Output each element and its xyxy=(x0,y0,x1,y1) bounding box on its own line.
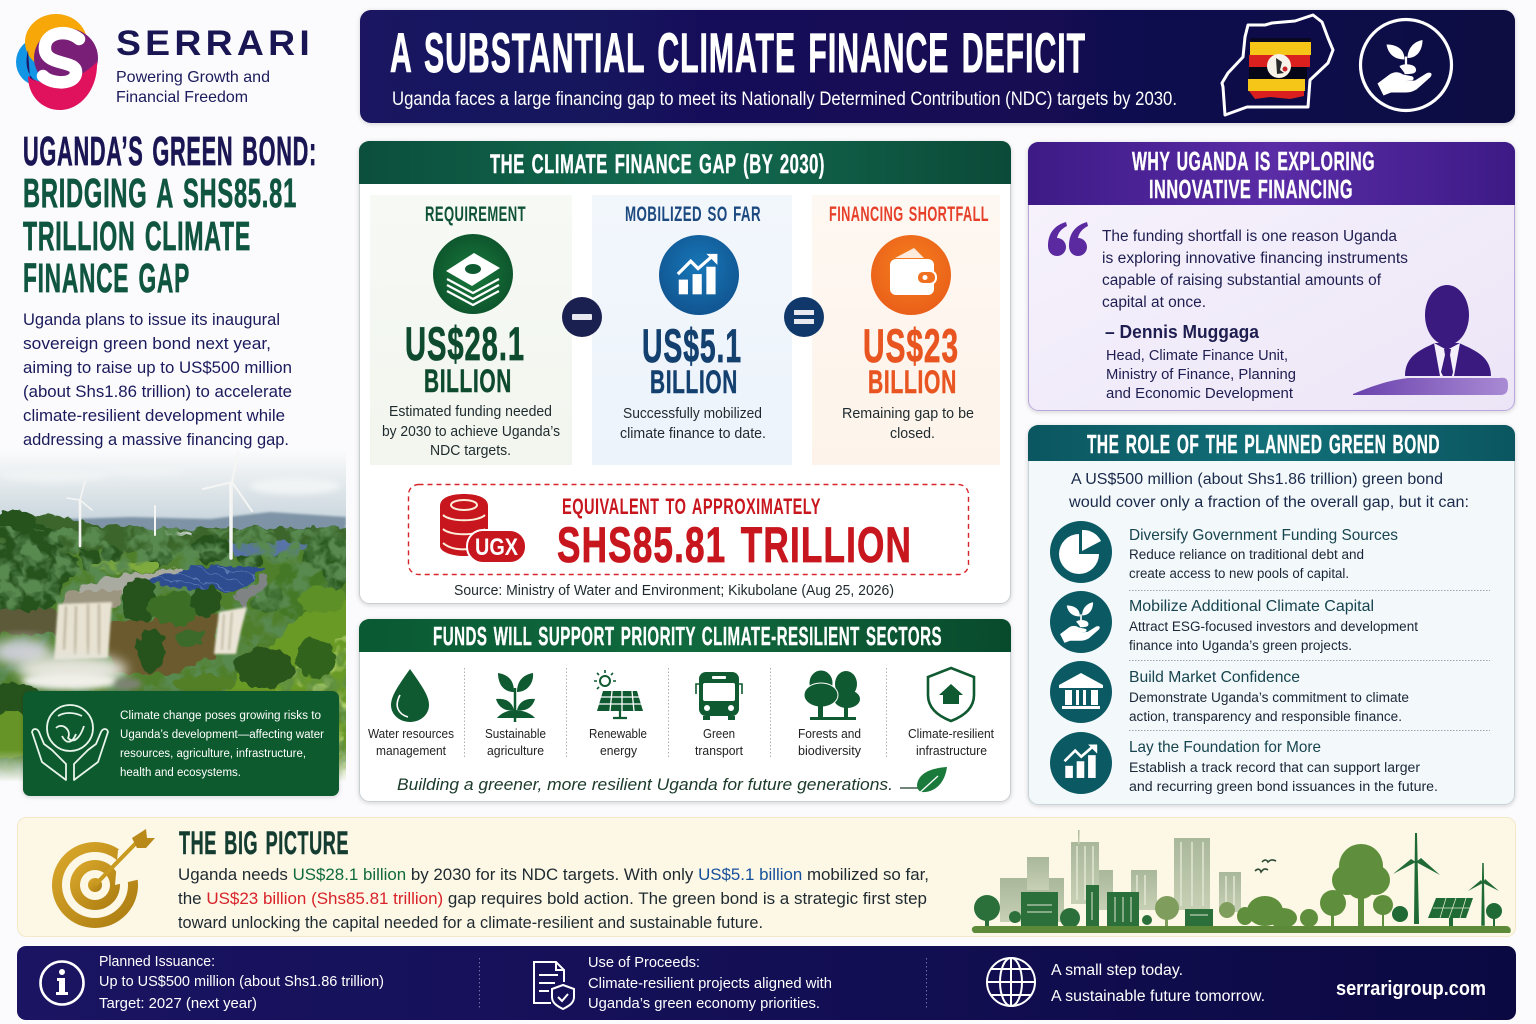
planned issuance: Target: 2027 (next year) xyxy=(99,995,257,1012)
rocks xyxy=(106,616,218,674)
panel heading: THE CLIMATE FINANCE GAP (BY 2030) xyxy=(490,149,825,179)
logo wordmark: SERRARI xyxy=(116,24,314,63)
use of proceeds xyxy=(588,954,832,1012)
icon: speaker silhouette xyxy=(1353,285,1508,395)
logo tagline: Financial Freedom xyxy=(116,89,248,106)
column: requirement: NDC targets. xyxy=(430,443,511,459)
main title: BRIDGING A SHS85.81 xyxy=(23,170,297,216)
column: requirement: REQUIREMENT xyxy=(425,203,526,226)
bright right slope xyxy=(224,600,346,772)
column: financing shortfall: closed. xyxy=(890,426,935,442)
attribution: Ministry of Finance, Planning xyxy=(1106,367,1296,383)
operator: minus xyxy=(562,297,602,337)
logo mark xyxy=(16,14,98,110)
item: diversify funding: create access to new pools of capital. xyxy=(1129,566,1349,581)
panel: why Uganda is exploring innovative financing xyxy=(1028,142,1515,410)
column: requirement xyxy=(370,195,572,465)
panel heading: FUNDS WILL SUPPORT PRIORITY CLIMATE-RESILIENT SECTORS xyxy=(433,621,942,651)
column: financing shortfall: US$23 xyxy=(863,319,959,372)
column: requirement: by 2030 to achieve Uganda’s xyxy=(382,424,560,440)
wind turbines xyxy=(67,452,252,558)
intro paragraph: addressing a massive financing gap. xyxy=(23,430,289,449)
intro paragraph: aiming to raise up to US$500 million xyxy=(23,358,292,377)
icon: hand holding seedling xyxy=(1360,20,1452,110)
attribution: – Dennis Muggaga xyxy=(1105,322,1260,342)
column: financing shortfall: FINANCING SHORTFALL xyxy=(829,203,989,226)
item: mobilize capital: finance into Uganda’s green projects. xyxy=(1129,638,1352,653)
attribution: and Economic Development xyxy=(1106,386,1293,402)
item: mobilize capital xyxy=(1050,591,1418,653)
sector: water xyxy=(368,669,454,758)
panel: role of the planned green bond xyxy=(1028,425,1515,804)
item: mobilize capital: Mobilize Additional Climate Capital xyxy=(1129,598,1374,615)
summary text xyxy=(178,865,929,932)
logo tagline: Powering Growth and xyxy=(116,69,270,86)
summary text: the US$23 billion (Shs85.81 trillion) gap requires bold action. The green bond is a strategic first step xyxy=(178,889,927,908)
main title xyxy=(23,128,317,301)
sector: agriculture: agriculture xyxy=(487,744,544,758)
column: requirement: Estimated funding needed xyxy=(389,404,552,420)
callout: Shs equivalent: SHS85.81 TRILLION xyxy=(557,517,912,573)
banner subtitle: Uganda faces a large financing gap to meet its Nationally Determined Contribution (NDC) targets by 2030. xyxy=(392,89,1177,110)
sector: forests: Forests and xyxy=(798,727,861,741)
logo tagline xyxy=(116,69,270,106)
callout: climate change risks: Uganda’s development—affecting water xyxy=(120,729,324,741)
icon: UGX coins: UGX xyxy=(475,534,518,561)
sector: infrastructure xyxy=(908,668,995,758)
foliage texture xyxy=(0,528,380,778)
column: mobilized so far: climate finance to date. xyxy=(620,426,766,442)
callout: climate change risks: resources, agriculture, infrastructure, xyxy=(120,748,306,760)
callout: climate change risks xyxy=(23,691,339,796)
panel heading xyxy=(1132,146,1375,204)
column: mobilized so far xyxy=(592,195,792,465)
sector: water: management xyxy=(376,744,446,758)
heading: THE BIG PICTURE xyxy=(179,825,349,861)
quote text: capital at once. xyxy=(1102,294,1206,311)
intro text: A US$500 million (about Shs1.86 trillion) green bond xyxy=(1071,471,1443,488)
sector: solar xyxy=(589,670,647,758)
sector: water: Water resources xyxy=(368,727,454,741)
callout: Shs equivalent: EQUIVALENT TO APPROXIMATELY xyxy=(562,494,821,519)
panel: priority sectors xyxy=(359,619,1011,802)
panel heading: INNOVATIVE FINANCING xyxy=(1149,174,1353,204)
planned issuance: Up to US$500 million (about Shs1.86 trillion) xyxy=(99,973,384,990)
operator: equals xyxy=(784,297,824,337)
attribution xyxy=(1105,322,1296,402)
intro paragraph: climate-resilient development while xyxy=(23,406,285,425)
column: mobilized so far: MOBILIZED SO FAR xyxy=(625,203,761,226)
sector: transport: Green xyxy=(703,727,735,741)
intro paragraph xyxy=(23,310,292,449)
item: market confidence: Demonstrate Uganda’s commitment to climate xyxy=(1129,690,1409,705)
item: lay the foundation: Lay the Foundation for More xyxy=(1129,739,1321,756)
column: financing shortfall xyxy=(812,195,1000,465)
far solar farm xyxy=(228,543,317,556)
header banner xyxy=(360,10,1515,123)
sector: infrastructure: Climate-resilient xyxy=(908,727,995,741)
item: market confidence xyxy=(1050,661,1409,724)
main title: TRILLION CLIMATE xyxy=(23,213,251,259)
column: requirement: US$28.1 xyxy=(405,317,525,370)
callout: climate change risks: health and ecosystems. xyxy=(120,767,241,779)
item: diversify funding: Diversify Government Funding Sources xyxy=(1129,527,1398,544)
attribution: Head, Climate Finance Unit, xyxy=(1106,348,1288,364)
main title: FINANCE GAP xyxy=(23,255,190,301)
item: lay the foundation xyxy=(1050,732,1438,794)
item: market confidence: Build Market Confidence xyxy=(1129,669,1300,686)
main title: UGANDA’S GREEN BOND: xyxy=(23,128,317,174)
item: market confidence: action, transparency and responsible finance. xyxy=(1129,709,1402,724)
intro paragraph: (about Shs1.86 trillion) to accelerate xyxy=(23,382,292,401)
foreground bushes xyxy=(0,586,346,759)
intro paragraph: Uganda plans to issue its inaugural xyxy=(23,310,280,329)
icon: quote mark xyxy=(1048,222,1088,256)
intro paragraph: sovereign green bond next year, xyxy=(23,334,271,353)
icon: Uganda map with flag xyxy=(1222,15,1333,115)
icon: wallet xyxy=(871,235,951,315)
sector: infrastructure: infrastructure xyxy=(916,744,987,758)
icon: UGX coins xyxy=(440,494,526,563)
column: mobilized so far: Successfully mobilized xyxy=(623,406,762,422)
item: diversify funding: Reduce reliance on traditional debt and xyxy=(1129,547,1364,562)
column: financing shortfall: Remaining gap to be xyxy=(842,406,974,422)
tagline: Building a greener, more resilient Uganda for future generations. xyxy=(397,775,893,794)
sector: solar: Renewable xyxy=(589,727,647,741)
sector: solar: energy xyxy=(600,744,638,758)
icon: leaf xyxy=(900,767,947,796)
column: financing shortfall: BILLION xyxy=(868,364,957,400)
use of proceeds: Use of Proceeds: xyxy=(588,954,700,971)
footer bar xyxy=(17,946,1516,1020)
item: lay the foundation: Establish a track record that can support larger xyxy=(1129,760,1421,775)
column: requirement: BILLION xyxy=(424,363,512,399)
closing message: A sustainable future tomorrow. xyxy=(1051,988,1265,1005)
sector: forests xyxy=(798,670,862,758)
column: mobilized so far: US$5.1 xyxy=(642,319,742,372)
river and near solar farm xyxy=(78,566,184,594)
sector: transport xyxy=(695,672,743,758)
source note: Source: Ministry of Water and Environment; Kikubolane (Aug 25, 2026) xyxy=(454,583,894,599)
planned issuance: Planned Issuance: xyxy=(99,953,215,970)
intro text: would cover only a fraction of the overall gap, but it can: xyxy=(1068,494,1469,511)
waterfalls xyxy=(62,590,122,608)
summary text: Uganda needs US$28.1 billion by 2030 for its NDC targets. With only US$5.1 billion mobilized so far, xyxy=(178,865,929,884)
panel: the big picture xyxy=(18,818,1516,936)
sector: forests: biodiversity xyxy=(798,744,862,758)
column: mobilized so far: BILLION xyxy=(650,364,738,400)
bushes over rocks xyxy=(122,578,158,622)
icon: rising chart xyxy=(659,235,739,315)
intro text xyxy=(1068,471,1469,511)
icon: target with arrow xyxy=(52,829,155,928)
illustration: green city skyline xyxy=(972,830,1511,933)
icon: money stack xyxy=(433,234,513,314)
quote text: capable of raising substantial amounts of xyxy=(1102,272,1382,289)
summary text: toward unlocking the capital needed for a climate-resilient and sustainable future. xyxy=(178,913,763,932)
quote text: is exploring innovative financing instruments xyxy=(1102,250,1408,267)
icon: globe xyxy=(987,958,1035,1006)
website: serrarigroup.com xyxy=(1336,978,1486,1000)
quote text xyxy=(1102,228,1408,311)
sector: agriculture xyxy=(485,673,546,758)
item: lay the foundation: and recurring green bond issuances in the future. xyxy=(1129,779,1438,794)
item: diversify funding xyxy=(1050,521,1398,583)
sector: transport: transport xyxy=(695,744,743,758)
sector: agriculture: Sustainable xyxy=(485,727,546,741)
closing message: A small step today. xyxy=(1051,962,1183,979)
closing message xyxy=(1051,962,1265,1005)
icon: hands holding globe xyxy=(32,705,108,780)
landscape photo illustration xyxy=(0,451,346,780)
callout: climate change risks: Climate change poses growing risks to xyxy=(120,710,321,722)
item: mobilize capital: Attract ESG-focused investors and development xyxy=(1129,619,1418,634)
icon: info xyxy=(40,962,84,1004)
panel: climate finance gap xyxy=(359,141,1011,604)
icon: document with shield xyxy=(534,962,574,1009)
use of proceeds: Climate-resilient projects aligned with xyxy=(588,975,832,992)
callout: Shs equivalent xyxy=(408,484,968,574)
planned issuance xyxy=(99,953,384,1012)
panel heading: WHY UGANDA IS EXPLORING xyxy=(1132,146,1375,176)
quote text: The funding shortfall is one reason Uganda xyxy=(1102,228,1397,245)
use of proceeds: Uganda’s green economy priorities. xyxy=(588,995,820,1012)
